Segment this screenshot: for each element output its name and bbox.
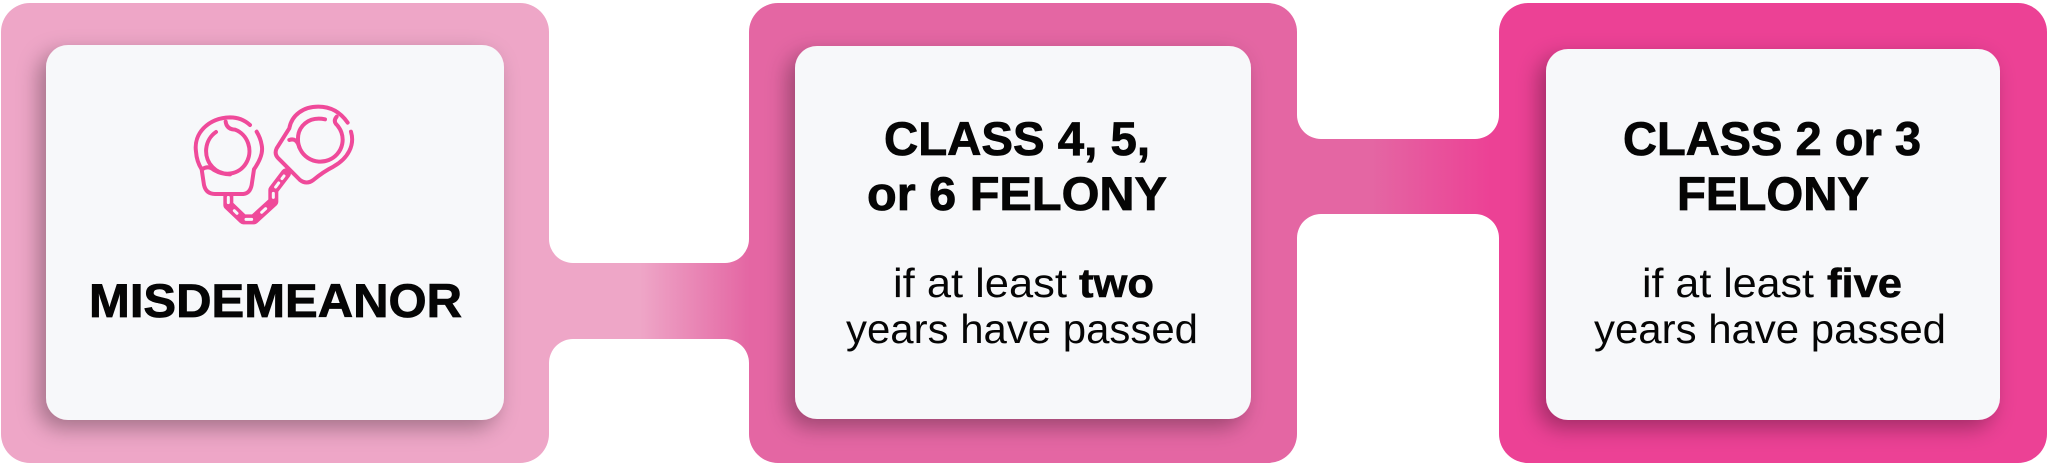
text: two year condition: if at least xyxy=(893,260,1068,306)
text: five year condition: years have passed xyxy=(1594,306,1946,352)
text: five year condition: five xyxy=(1827,260,1902,306)
text: two year condition: years have passed xyxy=(846,306,1198,352)
icon: handcuffs xyxy=(196,107,352,219)
heading: misdemeanor: MISDEMEANOR xyxy=(89,274,462,327)
card: misdemeanor xyxy=(46,45,504,420)
card: class 4, 5, or 6 felony xyxy=(795,46,1251,419)
connector: class 4, 5, or 6 felony to class 2 or 3 felony xyxy=(1297,115,1499,238)
card: class 2 or 3 felony xyxy=(1546,49,2000,420)
heading: class 2 or 3 felony: FELONY xyxy=(1677,167,1869,220)
panel: class 2 or 3 felony background xyxy=(1499,3,2047,463)
heading: class 4, 5, or 6 felony: CLASS 4, 5, xyxy=(884,112,1150,165)
text: five year condition: if at least xyxy=(1642,260,1815,306)
heading: class 4, 5, or 6 felony: or 6 FELONY xyxy=(867,167,1167,220)
heading: class 2 or 3 felony: CLASS 2 or 3 xyxy=(1623,112,1921,165)
text: two year condition: two xyxy=(1079,260,1154,306)
connector: misdemeanor to class 4, 5, or 6 felony xyxy=(549,239,749,363)
panel: class 4, 5, or 6 felony background xyxy=(749,3,1297,463)
panel: misdemeanor background xyxy=(1,3,549,463)
